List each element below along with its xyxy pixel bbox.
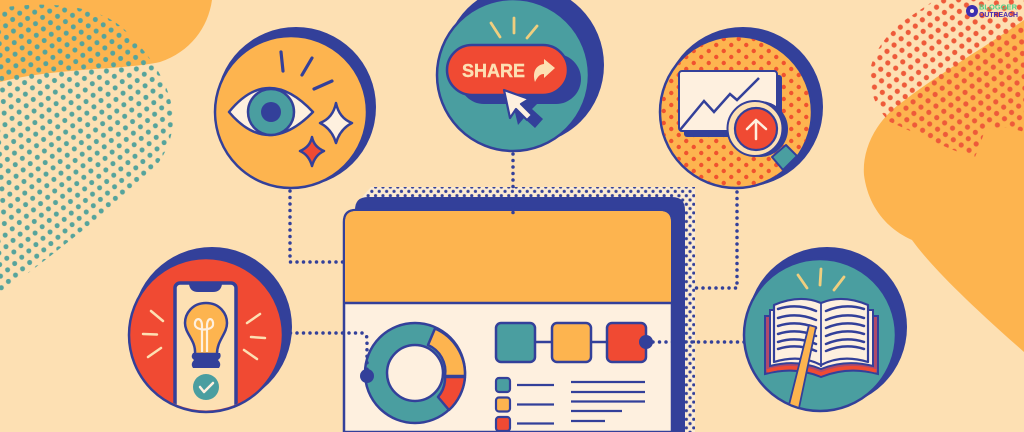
node: donut connector <box>360 369 374 383</box>
icon: chart circle <box>660 27 823 188</box>
up arrow <box>747 120 766 139</box>
icon: eye circle <box>215 27 376 188</box>
connectors over the panel <box>284 333 746 370</box>
icon: book circle <box>744 247 907 411</box>
logo: Blogger Outreach <box>966 4 1018 19</box>
back pages <box>770 310 873 369</box>
button shadow <box>459 54 581 104</box>
sparkle: cream <box>320 103 352 143</box>
share arrow <box>534 59 555 82</box>
legend <box>496 378 554 431</box>
dashboard panel <box>344 197 685 432</box>
share connector end <box>511 207 515 218</box>
chart screen shadow <box>684 75 782 137</box>
magnifier ring <box>728 101 782 156</box>
icon: share circle <box>437 0 604 151</box>
halftone: teal dots left <box>0 5 173 294</box>
cursor <box>504 90 532 120</box>
rays <box>798 269 844 290</box>
pupil <box>261 102 281 122</box>
front pages <box>774 299 868 365</box>
donut chart <box>365 323 465 423</box>
panel body <box>344 210 672 432</box>
check badge <box>193 374 219 400</box>
magnifier shadow <box>732 101 788 157</box>
iris <box>248 89 294 135</box>
trend line <box>680 78 759 130</box>
rays <box>143 311 265 359</box>
panel halftone halo <box>355 187 695 432</box>
bulb base <box>192 353 221 368</box>
right page text <box>826 306 864 351</box>
eye white <box>229 88 313 135</box>
text lines <box>571 382 645 421</box>
bulb <box>185 303 227 354</box>
red page edge <box>767 368 876 374</box>
panel shadow <box>355 197 685 432</box>
left page text <box>778 306 816 351</box>
rays <box>491 18 537 38</box>
share button <box>447 45 568 95</box>
logo: Blogger Outreach: OUTREACH <box>979 12 1018 19</box>
logo: Blogger Outreach: BLOGGER <box>979 4 1017 12</box>
halftone: red dots right <box>869 0 1024 157</box>
node: flow connector <box>639 335 653 349</box>
rays <box>281 52 332 89</box>
phone <box>175 283 236 423</box>
sparkle: red <box>300 137 324 166</box>
magnifier lens <box>735 108 777 150</box>
book cover <box>765 316 878 377</box>
blob: right orange <box>864 20 1024 352</box>
filament <box>195 319 213 352</box>
pencil <box>789 325 816 408</box>
blob: top left orange <box>0 0 212 82</box>
cursor shadow <box>512 100 543 128</box>
icon: lightbulb phone circle <box>129 247 292 423</box>
magnifier handle <box>772 145 797 170</box>
panel header <box>345 211 671 303</box>
chart screen <box>679 71 777 131</box>
connectors outside the panel <box>290 154 737 288</box>
flow squares <box>496 323 646 362</box>
share label: SHARE <box>462 61 525 81</box>
